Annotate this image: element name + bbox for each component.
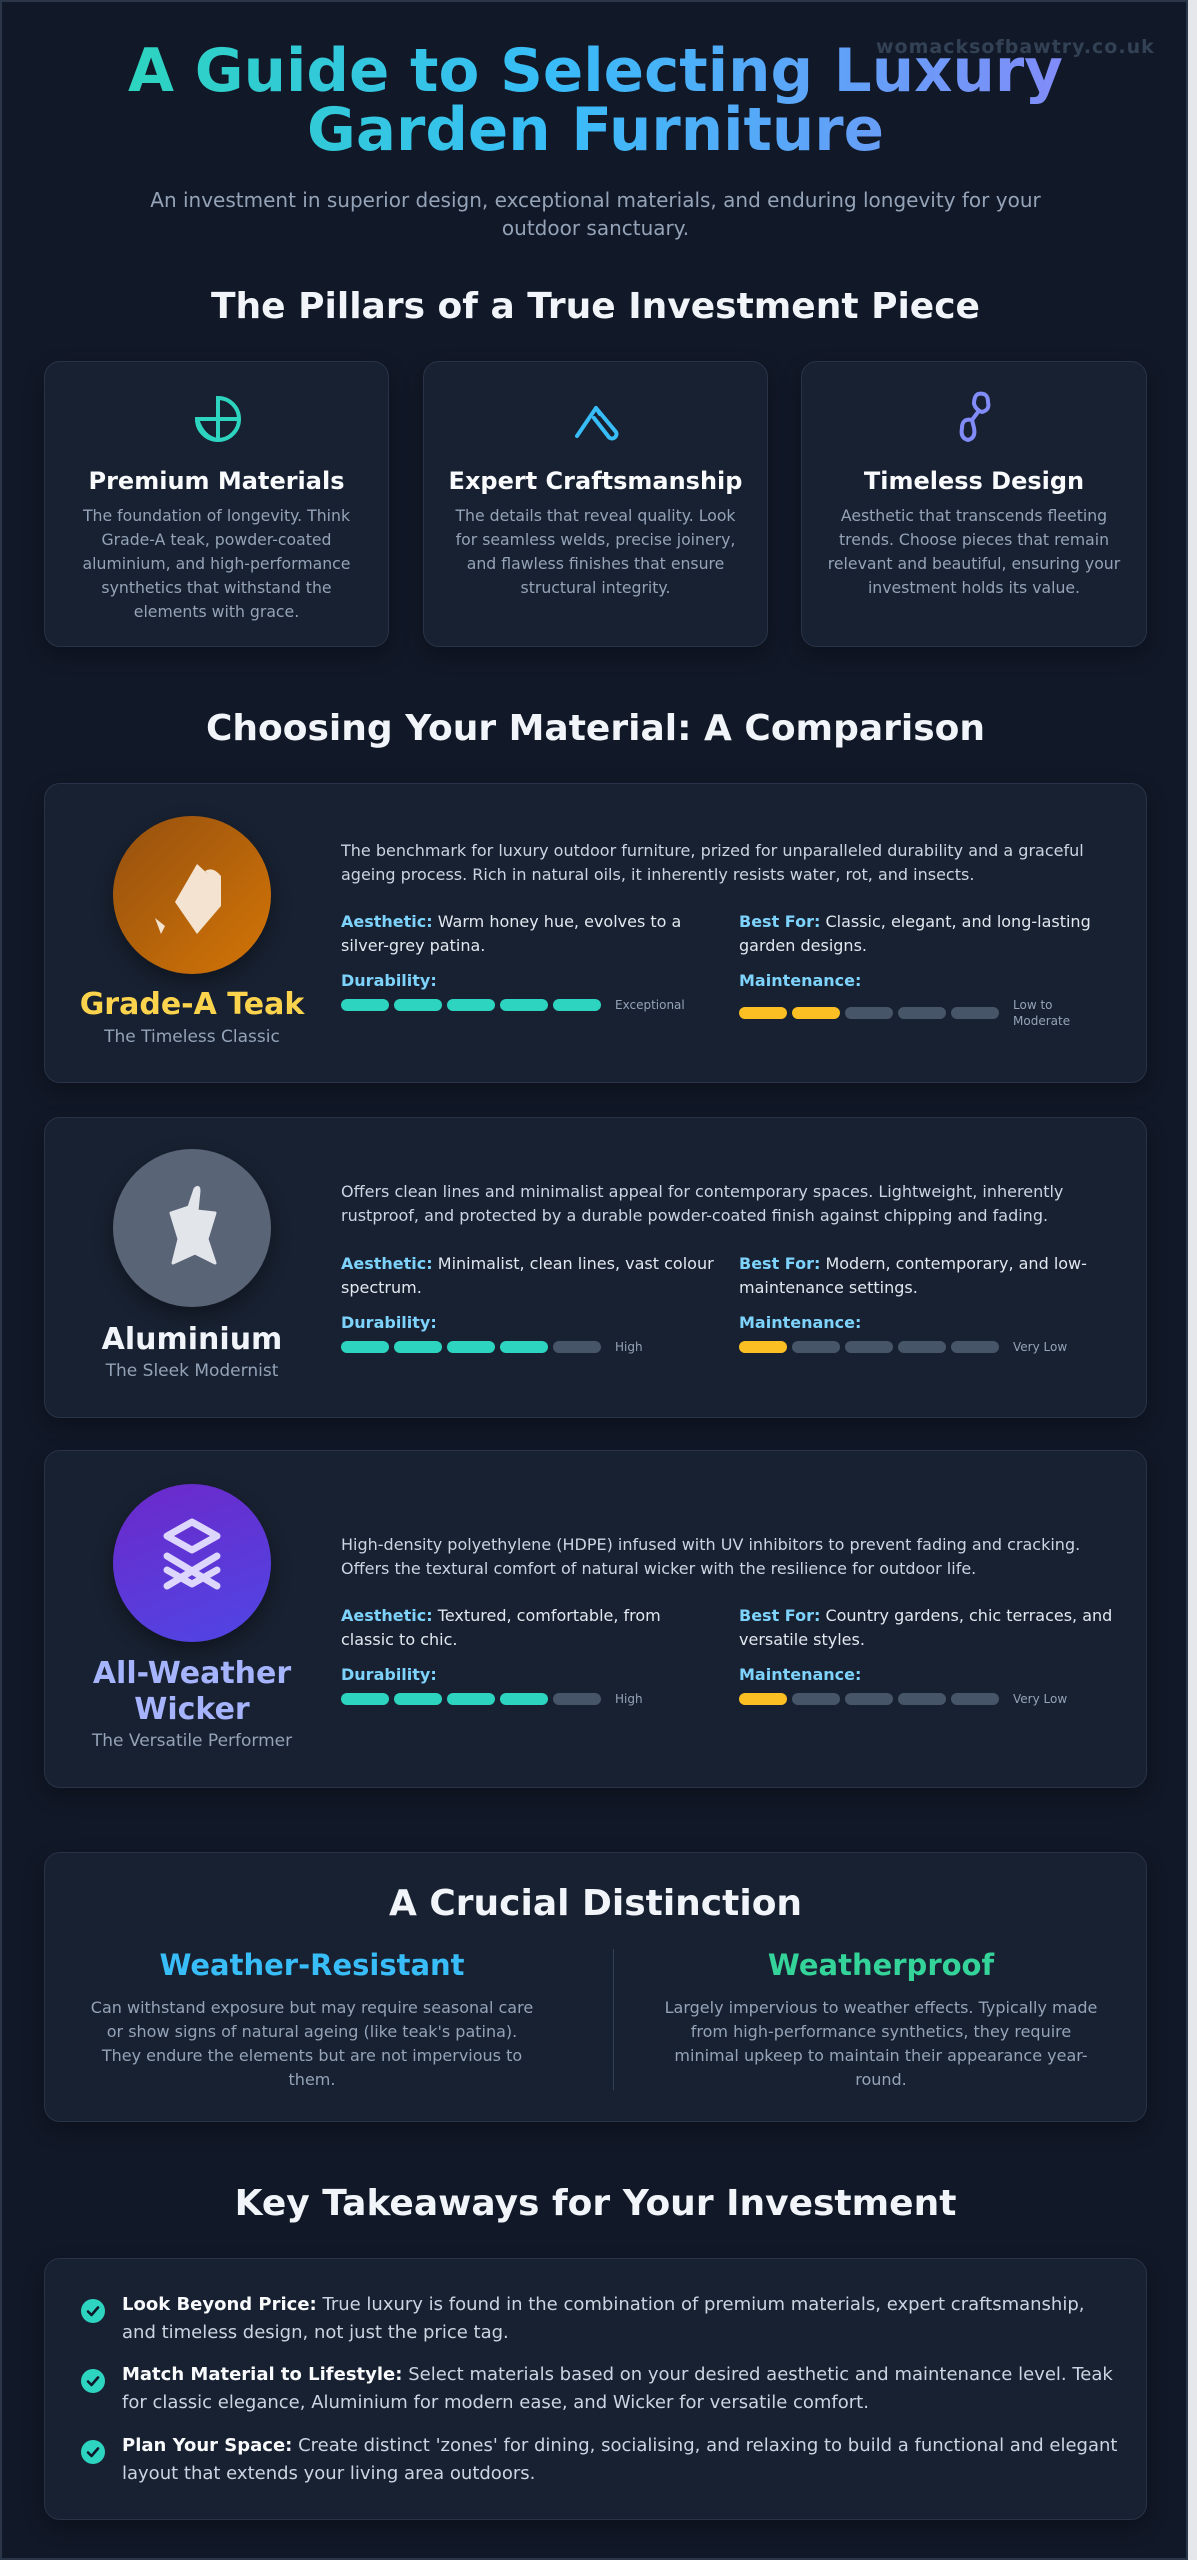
subtitle: The Timeless Classic	[104, 1027, 280, 1047]
text: The foundation of longevity. Think Grade-A teak, powder-coated aluminium, and high-performance synthetics that withstand the elements with grace.	[83, 506, 350, 621]
maintenance bars: Very Low	[1013, 1340, 1067, 1354]
durability label: Durability:	[341, 1665, 437, 1684]
name: Aluminium	[102, 1322, 282, 1357]
panel: crucial distinction	[44, 1852, 1147, 2122]
takeaway 3: Plan Your Space: Create distinct 'zones' for dining, socialising, and relaxing to build a functional and elegant layout that extends your living area outdoors.	[122, 2435, 1117, 2484]
icon: wicker circle	[113, 1484, 271, 1642]
name: Wicker	[134, 1692, 250, 1727]
durability label: Durability:	[341, 1313, 437, 1332]
description: High-density polyethylene (HDPE) infused with UV inhibitors to prevent fading and cracking. Offers the textural comfort of natural wicker with the resilience for outdoor life.	[341, 1535, 1080, 1578]
name	[93, 1656, 292, 1727]
aesthetic: Aesthetic: Minimalist, clean lines, vast colour spectrum.	[341, 1254, 714, 1297]
title: A Guide to Selecting Luxury	[128, 37, 1063, 106]
heading: pillars: The Pillars of a True Investment Piece	[211, 286, 980, 327]
maintenance bars: Very Low	[1013, 1692, 1067, 1706]
maintenance bars	[739, 1340, 1067, 1354]
subtitle: The Versatile Performer	[92, 1731, 292, 1751]
aesthetic: Aesthetic: Warm honey hue, evolves to a silver-grey patina.	[341, 912, 681, 955]
column: weather-resistant: Can withstand exposure but may require seasonal care or show signs of natural ageing (like teak's patina). They endure the elements but are not impervious to them.	[91, 1998, 533, 2089]
column: weatherproof: Weatherproof	[768, 1948, 994, 1982]
panel: pillar craftsmanship	[423, 361, 768, 647]
text: Aesthetic that transcends fleeting trends. Choose pieces that remain relevant and beautiful, ensuring your investment holds its value.	[828, 506, 1120, 597]
takeaway 2: Match Material to Lifestyle: Select materials based on your desired aesthetic and maintenance level. Teak for classic elegance, Aluminium for modern ease, and Wicker for versatile comfort.	[122, 2364, 1113, 2413]
heading: Timeless Design	[864, 467, 1084, 495]
aesthetic: Aesthetic: Textured, comfortable, from classic to chic.	[341, 1606, 661, 1649]
column: weatherproof: Largely impervious to weather effects. Typically made from high-performance synthetics, they require minimal upkeep to maintain their appearance year-round.	[665, 1998, 1097, 2089]
maintenance bars	[739, 1692, 1067, 1706]
heading: A Crucial Distinction	[389, 1883, 802, 1924]
best for: Best For: Classic, elegant, and long-lasting garden designs.	[739, 912, 1091, 955]
title	[128, 37, 1063, 165]
maintenance label: Maintenance:	[739, 1665, 861, 1684]
column: weather-resistant	[91, 1948, 533, 2089]
panel: pillar premium materials	[44, 361, 389, 647]
durability bars: High	[615, 1692, 643, 1706]
name: All-Weather	[93, 1656, 291, 1691]
icon: tool	[574, 406, 618, 440]
durability bars	[341, 1340, 643, 1354]
best for: Best For: Modern, contemporary, and low-maintenance settings.	[739, 1254, 1087, 1297]
panel: teak: Low to	[1013, 998, 1052, 1012]
heading: Premium Materials	[88, 467, 344, 495]
durability bars: High	[615, 1340, 643, 1354]
durability label: Durability:	[341, 971, 437, 990]
icon: aluminium circle	[113, 1149, 271, 1307]
title: Garden Furniture	[307, 96, 884, 165]
column: weatherproof	[665, 1948, 1097, 2089]
durability bars	[341, 1692, 643, 1706]
icon: teak circle	[113, 816, 271, 974]
description: Offers clean lines and minimalist appeal for contemporary spaces. Lightweight, inherently rustproof, and protected by a durable powder-coated finish against chipping and fading.	[341, 1182, 1063, 1225]
maintenance label: Maintenance:	[739, 1313, 861, 1332]
heading: comparison: Choosing Your Material: A Comparison	[206, 708, 985, 749]
watermark: womacksofbawtry.co.uk	[876, 36, 1155, 58]
icon: brush	[960, 392, 990, 442]
best for: Best For: Country gardens, chic terraces, and versatile styles.	[739, 1606, 1112, 1649]
heading: key takeaways: Key Takeaways for Your Investment	[235, 2183, 956, 2224]
panel: aluminium	[44, 1117, 1147, 1418]
panel: teak: Moderate	[1013, 1014, 1070, 1028]
subtitle: An investment in superior design, exceptional materials, and enduring longevity for your outdoor sanctuary.	[150, 188, 1041, 240]
panel: takeaways	[44, 2258, 1147, 2520]
description: The benchmark for luxury outdoor furniture, prized for unparalleled durability and a graceful ageing process. Rich in natural oils, it inherently resists water, rot, and insects.	[341, 841, 1084, 884]
maintenance bars	[739, 998, 1070, 1028]
durability bars	[341, 998, 685, 1012]
panel: wicker	[44, 1450, 1147, 1788]
durability bars: Exceptional	[615, 998, 685, 1012]
panel: teak	[44, 783, 1147, 1083]
name: Grade-A Teak	[80, 987, 304, 1022]
panel: pillar timeless design	[801, 361, 1147, 647]
maintenance label: Maintenance:	[739, 971, 861, 990]
icon: pie leaf	[194, 396, 241, 442]
column: weather-resistant: Weather-Resistant	[159, 1948, 465, 1982]
text: The details that reveal quality. Look for seamless welds, precise joinery, and flawless finishes that ensure structural integrity.	[455, 506, 736, 597]
heading: Expert Craftsmanship	[449, 467, 742, 495]
takeaway 1: Look Beyond Price: True luxury is found in the combination of premium materials, expert craftsmanship, and timeless design, not just the price tag.	[122, 2294, 1084, 2343]
subtitle: The Sleek Modernist	[106, 1361, 278, 1381]
